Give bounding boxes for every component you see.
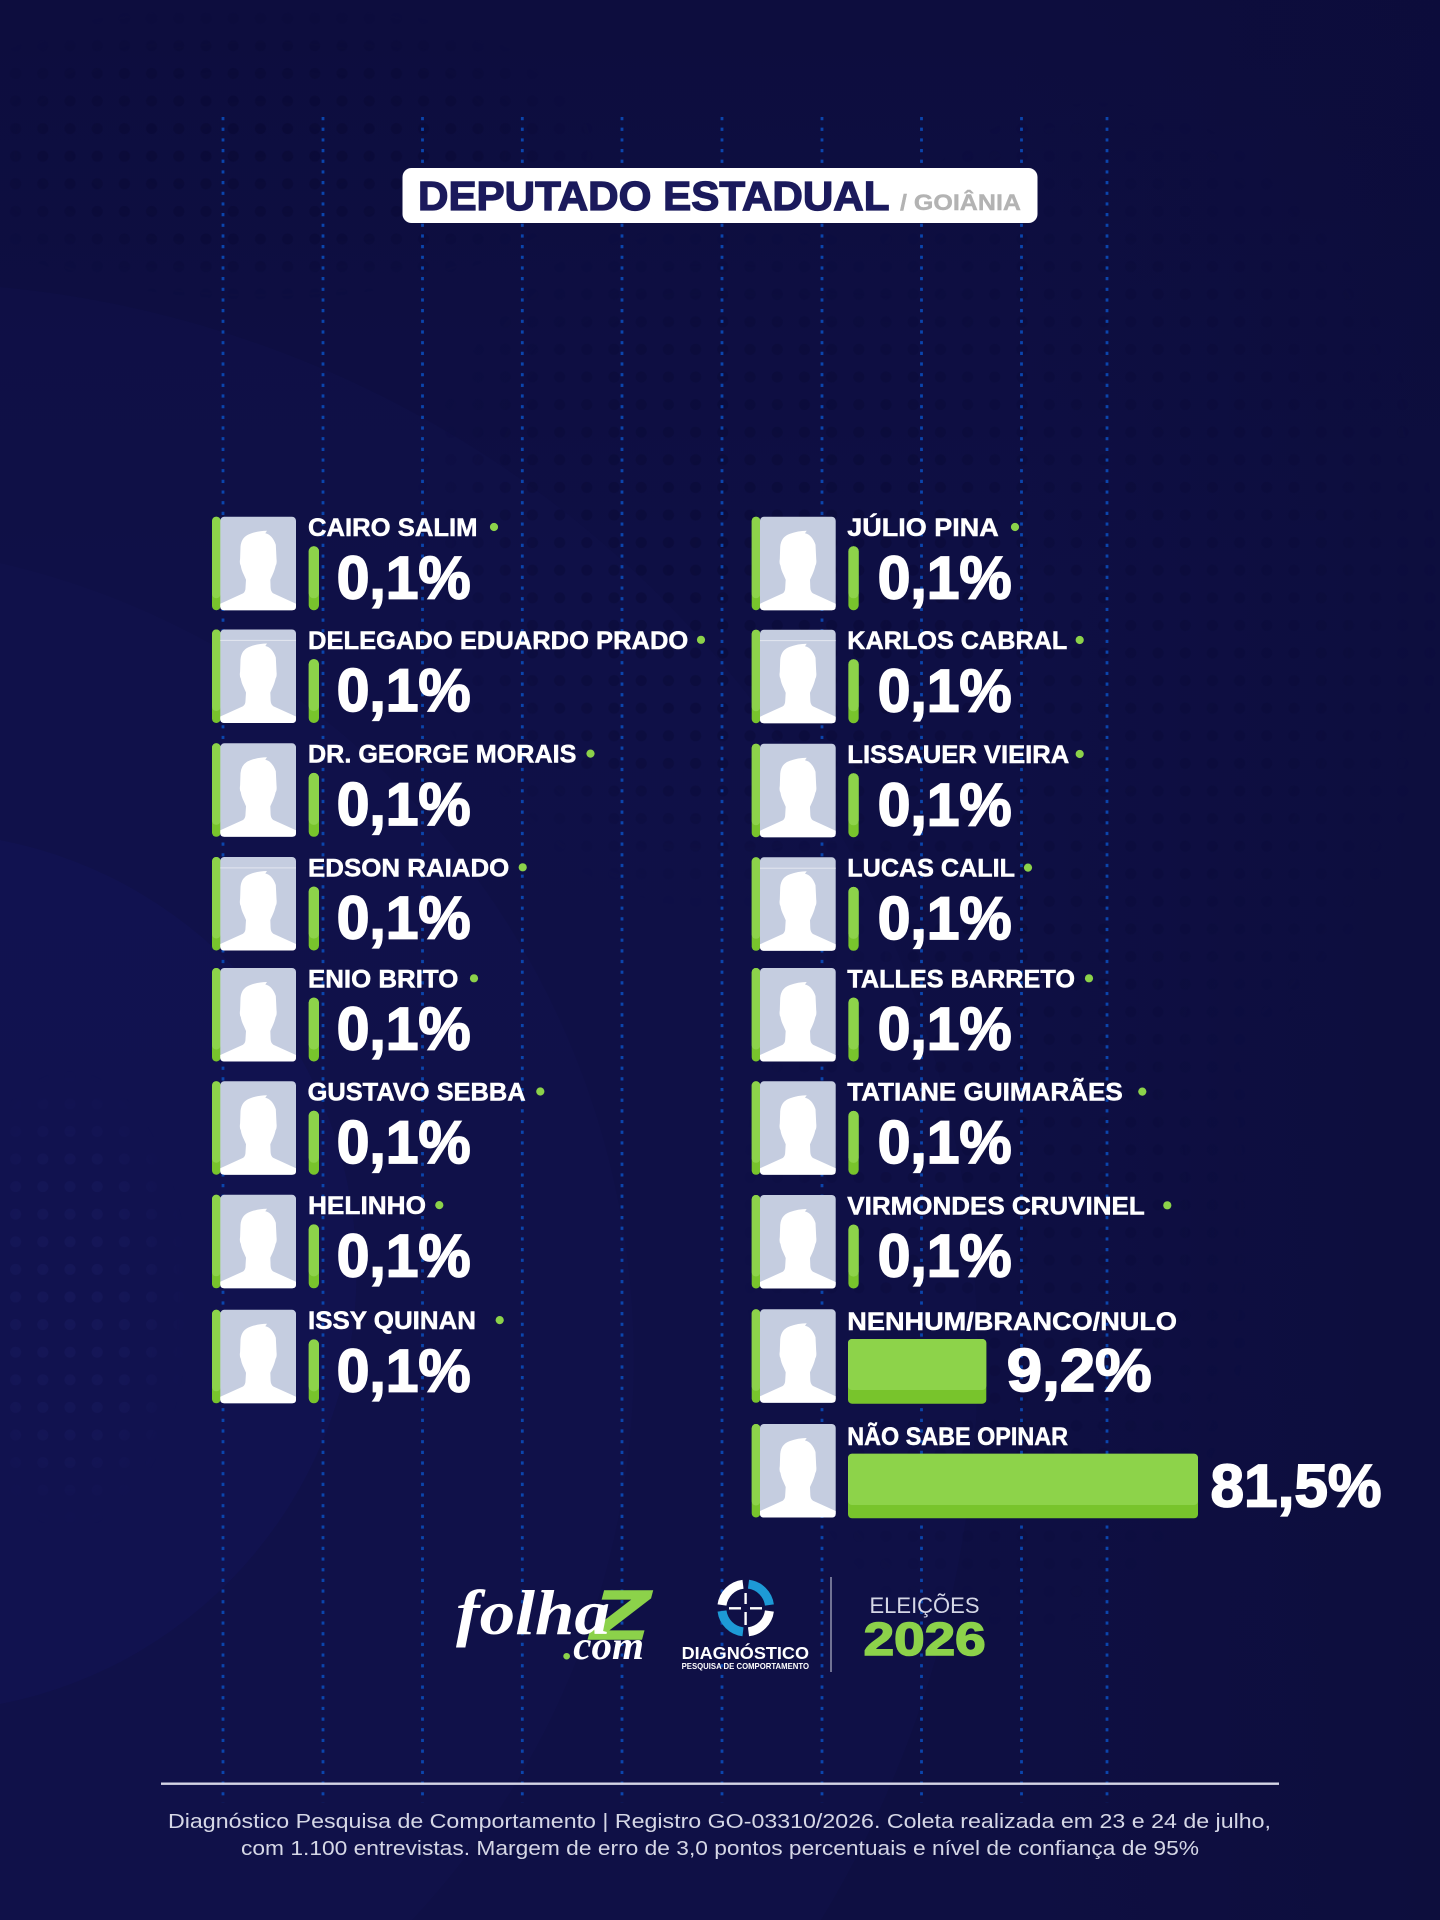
result: Nenhum/Branco/Nulo: NENHUM/BRANCO/NULO [847, 1308, 1177, 1336]
result: Não sabe opinar [752, 1421, 1382, 1520]
background [0, 49, 456, 1704]
logo: Eleições 2026: 2026 [864, 1613, 986, 1665]
logo: Eleições 2026 [864, 1593, 986, 1665]
candidate: Dr. George Morais: DR. GEORGE MORAIS [308, 741, 576, 769]
candidate: Edson Raiado [212, 854, 527, 952]
dotted vertical guide lines [223, 117, 1107, 1803]
candidate: Gustavo Sebba: GUSTAVO SEBBA [308, 1078, 526, 1106]
result: Não sabe opinar: NÃO SABE OPINAR [847, 1421, 1068, 1451]
candidate: Helinho: 0,1% [337, 1222, 471, 1289]
candidate: Talles Barreto [752, 965, 1093, 1063]
candidate: Cairo Salim: 0,1% [337, 544, 471, 611]
result: Não sabe opinar: 81,5% [1210, 1452, 1382, 1520]
logo: Eleições 2026: ELEIÇÕES [870, 1593, 980, 1618]
candidate: Helinho [212, 1192, 471, 1289]
candidate: Edson Raiado: 0,1% [337, 885, 471, 952]
candidate: Issy Quinan [212, 1307, 504, 1404]
logo: folhaZ.com: folha [456, 1578, 610, 1648]
candidate: Júlio Pina [752, 512, 1019, 611]
candidate: Lucas Calil: LUCAS CALIL [847, 855, 1015, 883]
title: / GOIÂNIA [900, 190, 1021, 215]
footer note [168, 1810, 1271, 1860]
candidate: Issy Quinan: 0,1% [337, 1337, 471, 1404]
right column: candidates [752, 512, 1382, 1520]
candidate: Gustavo Sebba: 0,1% [337, 1109, 471, 1176]
logo divider [830, 1577, 832, 1672]
candidate: Lissauer Vieira [752, 741, 1084, 838]
candidate: Lucas Calil [752, 855, 1032, 952]
candidate: Virmondes Cruvinel [752, 1192, 1171, 1290]
candidate: Talles Barreto: 0,1% [878, 996, 1012, 1063]
candidate: Virmondes Cruvinel: 0,1% [878, 1223, 1012, 1290]
candidate: Talles Barreto: TALLES BARRETO [847, 965, 1075, 993]
result: Nenhum/Branco/Nulo [752, 1308, 1177, 1404]
candidate: Karlos Cabral: 0,1% [878, 657, 1012, 724]
candidate: Enio Brito [212, 965, 478, 1063]
logo: Diagnóstico: DIAGNÓSTICO [682, 1642, 809, 1663]
candidate: Júlio Pina: JÚLIO PINA [847, 512, 999, 542]
title: DEPUTADO ESTADUAL [418, 173, 890, 219]
candidate: Delegado Eduardo Prado: 0,1% [337, 657, 471, 724]
logo: folhaZ.com: Z [588, 1576, 652, 1654]
candidate: Delegado Eduardo Prado [212, 627, 705, 724]
candidate: Issy Quinan: ISSY QUINAN [308, 1307, 476, 1335]
candidate: Enio Brito: 0,1% [337, 996, 471, 1063]
logo: Diagnóstico [682, 1584, 810, 1671]
candidate: Cairo Salim [212, 514, 498, 611]
footer note: com 1.100 entrevistas. Margem de erro de 3,0 pontos percentuais e nível de confiança de 95% [241, 1837, 1199, 1860]
candidate: Júlio Pina: 0,1% [878, 544, 1012, 611]
logo: Diagnóstico: PESQUISA DE COMPORTAMENTO [682, 1661, 810, 1671]
candidate: Helinho: HELINHO [308, 1192, 426, 1220]
result: Nenhum/Branco/Nulo: 9,2% [1007, 1337, 1152, 1404]
footer rule [161, 1782, 1279, 1785]
candidate: Delegado Eduardo Prado: DELEGADO EDUARDO PRADO [308, 627, 688, 655]
candidate: Tatiane Guimarães [752, 1077, 1146, 1176]
candidate: Virmondes Cruvinel: VIRMONDES CRUVINEL [847, 1192, 1145, 1220]
candidate: Tatiane Guimarães: TATIANE GUIMARÃES [847, 1077, 1123, 1107]
candidate: Gustavo Sebba [212, 1078, 544, 1176]
candidate: Enio Brito: ENIO BRITO [308, 965, 458, 993]
candidate: Lissauer Vieira: 0,1% [878, 771, 1012, 838]
candidate: Dr. George Morais: 0,1% [337, 771, 471, 838]
candidate: Lucas Calil: 0,1% [878, 885, 1012, 952]
logo: folhaZ.com [456, 1576, 652, 1668]
candidate: Cairo Salim: CAIRO SALIM [308, 514, 478, 542]
logo: folhaZ.com: .com [563, 1623, 644, 1668]
title [402, 168, 1038, 223]
candidate: Dr. George Morais [212, 741, 595, 838]
footer note: Diagnóstico Pesquisa de Comportamento | Registro GO-03310/2026. Coleta realizada em 23 e 24 de julho, [168, 1810, 1271, 1833]
candidate: Edson Raiado: EDSON RAIADO [308, 854, 509, 882]
candidate: Lissauer Vieira: LISSAUER VIEIRA [847, 741, 1069, 769]
candidate: Karlos Cabral [752, 627, 1084, 724]
candidate: Karlos Cabral: KARLOS CABRAL [847, 627, 1067, 655]
candidate: Tatiane Guimarães: 0,1% [878, 1109, 1012, 1176]
left column: candidates [212, 514, 705, 1404]
